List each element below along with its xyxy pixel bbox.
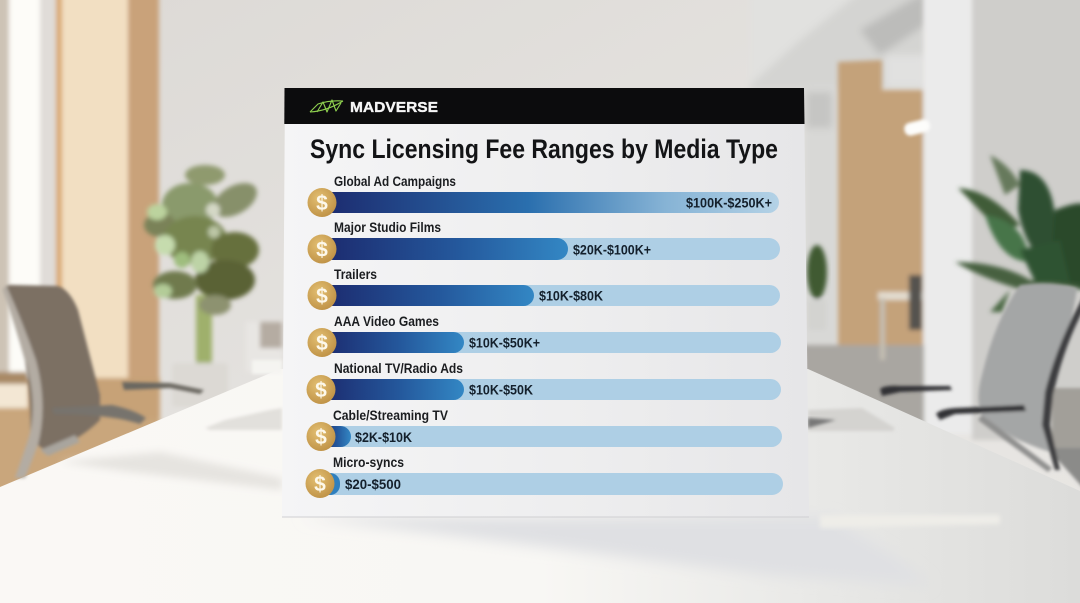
row: Global Ad Campaigns: Global Ad Campaigns [334,174,456,189]
row: Major Studio Films: Major Studio Films [334,220,441,235]
icon: coin: $ [316,332,328,355]
icon: coin [306,375,336,404]
icon: coin: $ [316,238,328,262]
plant left [144,165,282,407]
icon: coin [306,469,334,498]
icon: coin [308,234,336,264]
table [0,360,1080,603]
row: National TV/Radio Ads: $10K-$50K [469,382,533,398]
icon: coin: $ [316,192,328,215]
row: Micro-syncs [306,455,783,498]
icon: coin [308,188,336,217]
icon: coin: $ [314,473,326,496]
small far plant [807,245,827,330]
row: Cable/Streaming TV [306,408,782,451]
row: AAA Video Games: AAA Video Games [334,314,439,329]
right chair [880,283,1080,491]
icon: coin: $ [315,379,327,402]
icon: coin [306,422,336,451]
icon: coin: $ [316,285,328,308]
left chair [3,285,204,478]
title: Sync Licensing Fee Ranges by Media Type [310,134,778,164]
window and curtain [0,0,160,493]
row: Micro-syncs: Micro-syncs [333,455,404,470]
plant right [955,155,1080,312]
icon: madverse logo [310,100,343,112]
sign card [282,88,809,517]
row: Major Studio Films [308,220,780,264]
row: Trailers [308,267,780,310]
far right room [750,0,925,350]
table shadows [60,452,1000,585]
logo wordmark: MADVERSE [350,99,438,116]
icon: coin [308,328,336,357]
row: National TV/Radio Ads: National TV/Radio Ads [334,361,463,376]
row: AAA Video Games: $10K-$50K+ [469,334,540,350]
header bar [284,88,804,124]
row: Micro-syncs: $20-$500 [345,476,401,492]
icon: coin: $ [315,426,327,449]
row: Global Ad Campaigns [308,174,779,217]
row: Trailers: Trailers [334,267,377,282]
row: AAA Video Games [308,314,781,357]
ceiling light [903,118,931,137]
icon: coin [308,281,336,310]
row: Trailers: $10K-$80K [539,288,603,304]
row: Global Ad Campaigns: $100K-$250K+ [686,194,772,210]
row: National TV/Radio Ads [306,361,781,404]
row: Cable/Streaming TV: $2K-$10K [355,429,412,445]
row: Cable/Streaming TV: Cable/Streaming TV [333,408,448,423]
row: Major Studio Films: $20K-$100K+ [573,242,651,258]
